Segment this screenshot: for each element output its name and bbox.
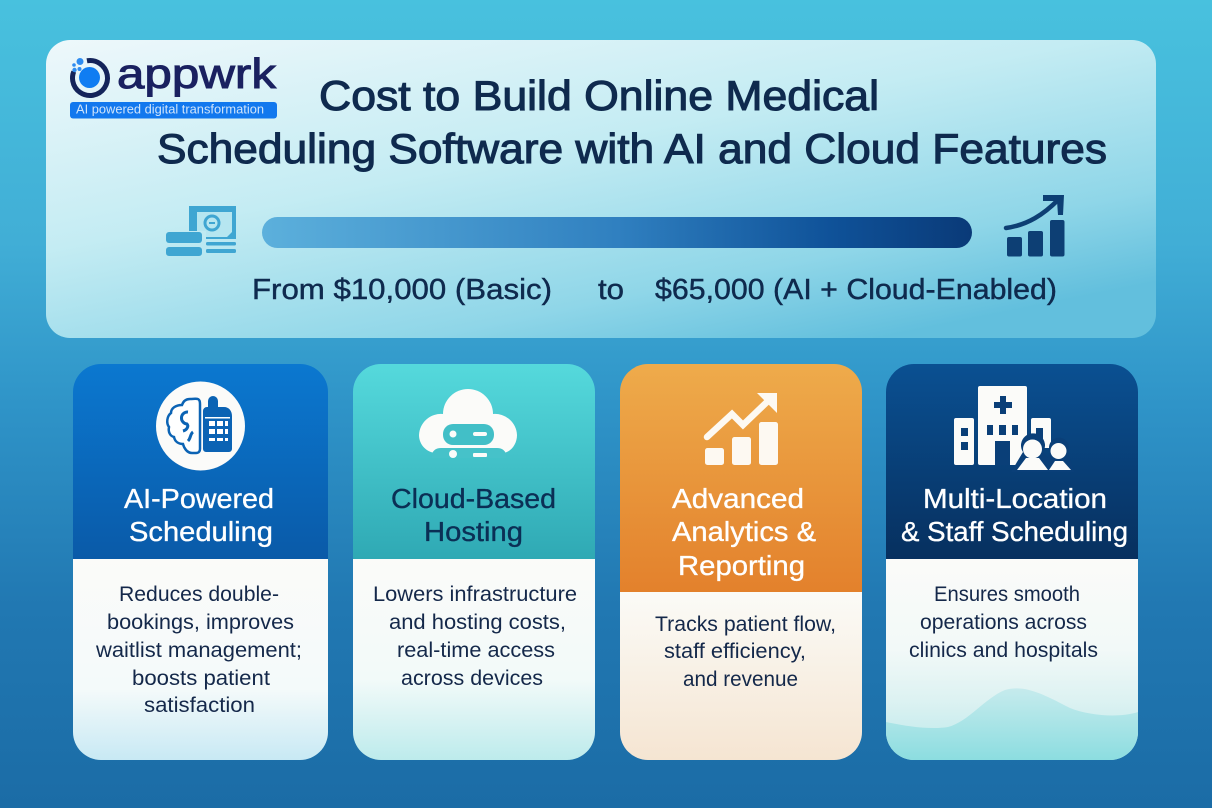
description (373, 583, 577, 690)
heading: Reporting (678, 550, 805, 581)
card: Cloud-Based Hosting (353, 364, 595, 760)
card: Multi-Location and Staff Scheduling (886, 364, 1138, 760)
icon: growth chart (1006, 195, 1064, 256)
description: Lowers infrastructure (373, 583, 577, 606)
heading (391, 483, 556, 547)
icon: hospital and staff (954, 386, 1074, 472)
range labels: $65,000 (AI + Cloud-Enabled) (655, 274, 1057, 306)
icon: cloud server (419, 389, 517, 458)
card: AI-Powered Scheduling (73, 364, 328, 760)
heading: Multi-Location (923, 483, 1107, 514)
heading (901, 483, 1128, 547)
description: waitlist management; (95, 639, 302, 662)
wave decoration (886, 688, 1138, 760)
description: Ensures smooth (934, 583, 1080, 606)
description: operations across (920, 611, 1087, 634)
logo: appwrk: AI powered digital transformation (76, 102, 264, 116)
icon: AI brain and calendar (156, 382, 245, 470)
description: Reduces double- (119, 583, 279, 606)
heading: Hosting (424, 516, 523, 547)
description: satisfaction (144, 694, 255, 717)
description: bookings, improves (107, 611, 294, 634)
description: real-time access (397, 639, 555, 662)
progress bar (262, 217, 972, 248)
logo: appwrk: appwrk (117, 50, 277, 97)
description: boosts patient (132, 667, 270, 690)
title: Scheduling Software with AI and Cloud Features (157, 125, 1107, 172)
description (655, 613, 836, 691)
description: Tracks patient flow, (655, 613, 836, 636)
heading: AI-Powered (124, 483, 274, 514)
description: and revenue (683, 668, 798, 691)
description: and hosting costs, (389, 611, 566, 634)
logo: appwrk (70, 50, 277, 118)
panel: cost header (46, 40, 1156, 338)
range labels: to (598, 274, 624, 306)
range labels (252, 274, 1057, 306)
heading (124, 483, 274, 547)
card: Advanced Analytics and Reporting (620, 364, 862, 760)
icon: analytics chart (705, 393, 778, 465)
heading (672, 483, 816, 581)
heading: Scheduling (129, 516, 273, 547)
heading: Cloud-Based (391, 483, 556, 514)
description (909, 583, 1098, 662)
title: Cost to Build Online Medical (319, 72, 879, 119)
description (95, 583, 302, 717)
description: clinics and hospitals (909, 639, 1098, 662)
heading: Advanced (672, 483, 804, 514)
description: across devices (401, 667, 543, 690)
heading: Analytics & (672, 516, 816, 547)
heading: & Staff Scheduling (901, 516, 1128, 547)
icon: money stack (166, 206, 236, 256)
title (157, 72, 1107, 172)
range labels: From $10,000 (Basic) (252, 274, 552, 306)
description: staff efficiency, (664, 640, 806, 663)
